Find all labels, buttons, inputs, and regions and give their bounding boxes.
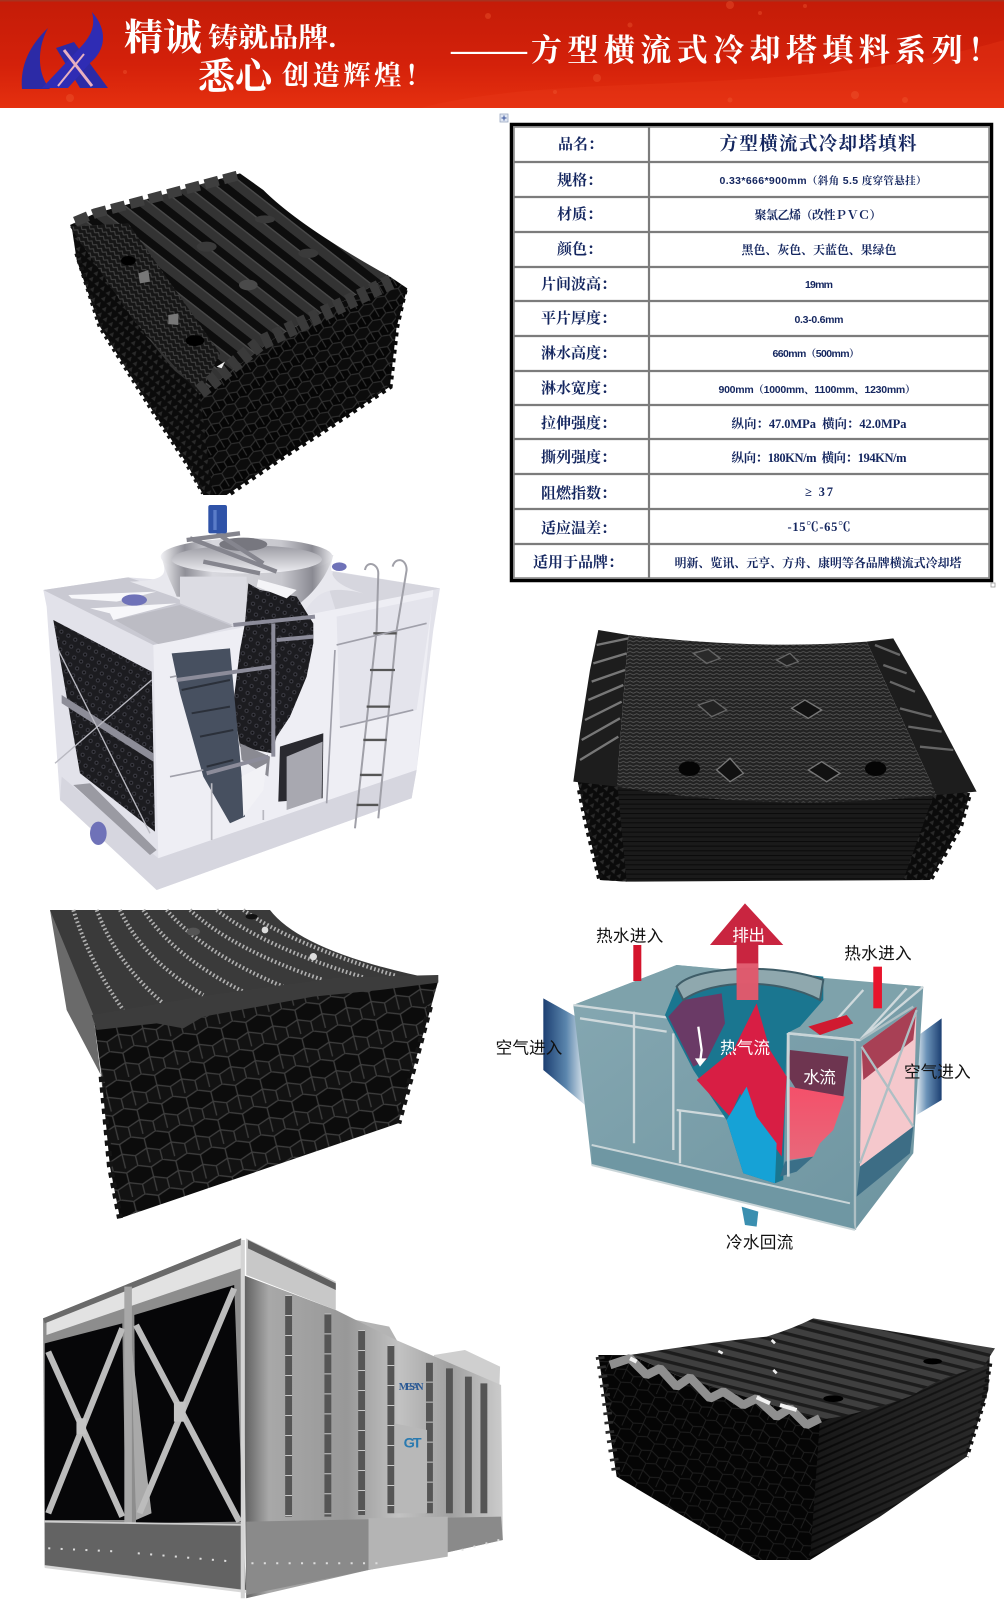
row: name: 方型横流式冷却塔填料 (720, 133, 917, 155)
row: colour: 颜色： (557, 240, 602, 258)
right ribs (867, 638, 977, 795)
left side face (72, 227, 227, 495)
left louvre mesh (53, 620, 155, 832)
hex front face (598, 1355, 820, 1560)
holes (121, 256, 136, 265)
row: brands: 明新、览讯、元亨、方舟、康明等各品牌横流式冷却塔 (674, 555, 962, 570)
labels: 热水进入 (596, 926, 664, 945)
photo: fill block bottom right (598, 1318, 995, 1560)
photo: fill block right middle (573, 630, 977, 882)
photo: fill block top left (70, 173, 407, 495)
tower body front (573, 965, 923, 1230)
brand marks: MESAN (399, 1382, 424, 1393)
row: colour (557, 240, 896, 258)
right face (243, 1275, 503, 1598)
row: flame index: ≥ 37 (805, 485, 833, 499)
cutaway mesh (233, 583, 313, 753)
cutaway interior (665, 968, 823, 1183)
hex front (93, 981, 438, 1218)
row: temperature (541, 519, 850, 537)
top surface (630, 1318, 995, 1423)
rivets (48, 1540, 499, 1563)
row: name (558, 133, 917, 155)
top surface (70, 173, 390, 395)
series title: —— (450, 34, 528, 67)
casing (43, 570, 440, 890)
row: tensile strength: 拉伸强度： (541, 414, 616, 432)
row: wave height (541, 275, 833, 293)
photo: fill block hex front (50, 910, 438, 1218)
table handle icon (500, 114, 508, 122)
row: water height (541, 344, 860, 362)
fan ring (161, 538, 333, 575)
motor (208, 505, 227, 533)
slogan: 铸就品牌. (208, 23, 336, 53)
row: colour: 黑色、灰色、天蓝色、果绿色 (742, 242, 896, 257)
slogan: 悉心 (198, 56, 277, 98)
front panels (153, 590, 433, 858)
row: wave height: 19mm (805, 279, 833, 291)
flanges (122, 594, 147, 606)
row: sheet thickness: 0.3-0.6mm (794, 314, 844, 326)
access door (278, 733, 323, 802)
top ribbed surface (50, 910, 438, 1022)
hot water pipes (633, 945, 641, 981)
roof (573, 965, 923, 1040)
row: flame index (541, 484, 833, 502)
corner ribs (200, 280, 395, 392)
row: name: 品名： (558, 135, 603, 153)
row: water width: 淋水宽度： (541, 379, 616, 397)
labels: 空气进入 (904, 1063, 971, 1082)
louvres (45, 1323, 126, 1520)
slogan: 创造辉煌！ (282, 61, 432, 91)
slogan: 精诚 (124, 17, 202, 59)
row: brands: 适用于品牌： (533, 553, 623, 571)
illustration: cutaway cooling tower (43, 505, 440, 890)
row: spec: 规格： (557, 171, 602, 189)
cold water pipe (742, 1207, 758, 1227)
side strip (50, 910, 120, 1218)
labels (496, 926, 971, 1252)
rear box and fan stack (348, 1318, 400, 1345)
row: brands (533, 553, 962, 571)
row: temperature: 适应温差： (541, 519, 616, 537)
front seams (170, 623, 427, 803)
white flow arrow (698, 1027, 702, 1063)
base (60, 770, 417, 890)
top flange teeth (75, 175, 240, 222)
row: tear strength: 撕列强度： (541, 448, 616, 466)
front stack (577, 770, 970, 882)
series title: 方型横流式冷却塔填料系列！ (531, 33, 999, 68)
row: water width: 900mm（1000mm、1100mm、1230mm） (718, 384, 916, 396)
labels: 空气进入 (496, 1039, 563, 1058)
row: tear strength: 纵向：180KN/m 横向：194KN/m (732, 450, 907, 465)
row: tear strength (541, 448, 907, 466)
ladder (355, 560, 407, 828)
specification table (512, 124, 992, 580)
fan ring (677, 969, 823, 1000)
holes and slots (679, 761, 700, 776)
labels: 排出 (732, 926, 765, 945)
x braces (48, 1288, 239, 1522)
fill pack stack (172, 648, 245, 823)
top flange (92, 975, 438, 1030)
row: water height: 淋水高度： (541, 344, 616, 362)
side seams (289, 1295, 484, 1517)
fan stack (130, 555, 363, 625)
bright spots (246, 914, 258, 919)
row: sheet thickness (541, 309, 844, 327)
row: sheet thickness: 平片厚度： (541, 309, 616, 327)
top herringbone (617, 635, 937, 802)
labels: 热水进入 (844, 944, 912, 963)
row: spec (557, 171, 926, 189)
frame bars (177, 617, 315, 773)
row: tensile strength: 纵向：47.0MPa 横向：42.0MPa (732, 416, 907, 431)
labels: 冷水回流 (726, 1233, 794, 1252)
front hex face (200, 277, 407, 495)
row: water height: 660mm（500mm） (772, 348, 860, 360)
row: temperature: -15℃-65℃ (788, 520, 850, 534)
row: spec: 0.33*666*900mm（斜角 5.5 度穿管悬挂） (720, 174, 926, 187)
labels: 热气流 (720, 1039, 770, 1058)
photo: packaged steel cooling tower: GT (404, 1436, 422, 1451)
water panel (788, 1050, 848, 1097)
left front face (43, 1238, 243, 1592)
labels: 水流 (803, 1068, 836, 1087)
serrated bright edge (610, 1358, 820, 1425)
hot air arrow (710, 903, 783, 1000)
slogan (124, 17, 432, 98)
logo (22, 12, 108, 89)
holes (823, 1395, 843, 1402)
left ribs (573, 630, 628, 787)
right side window (860, 1007, 917, 1167)
air inlet panels (543, 998, 585, 1105)
row: water width (541, 379, 916, 397)
row: flame index: 阻燃指数： (541, 484, 616, 502)
row: tensile strength (541, 414, 907, 432)
header banner (0, 0, 1004, 108)
photo: packaged steel cooling tower (43, 1238, 503, 1598)
lower skirt (45, 1522, 246, 1590)
table resize handle (991, 583, 995, 587)
row: wave height: 片间波高： (541, 275, 616, 293)
diagram: crossflow tower airflow (496, 903, 971, 1252)
right side layers (810, 1353, 990, 1560)
row: material: 材质： (557, 205, 602, 223)
top deck (43, 577, 233, 645)
base band (592, 1145, 855, 1230)
row: material: 聚氯乙烯（改性ＰＶＣ） (754, 207, 882, 222)
row: material (557, 205, 882, 223)
